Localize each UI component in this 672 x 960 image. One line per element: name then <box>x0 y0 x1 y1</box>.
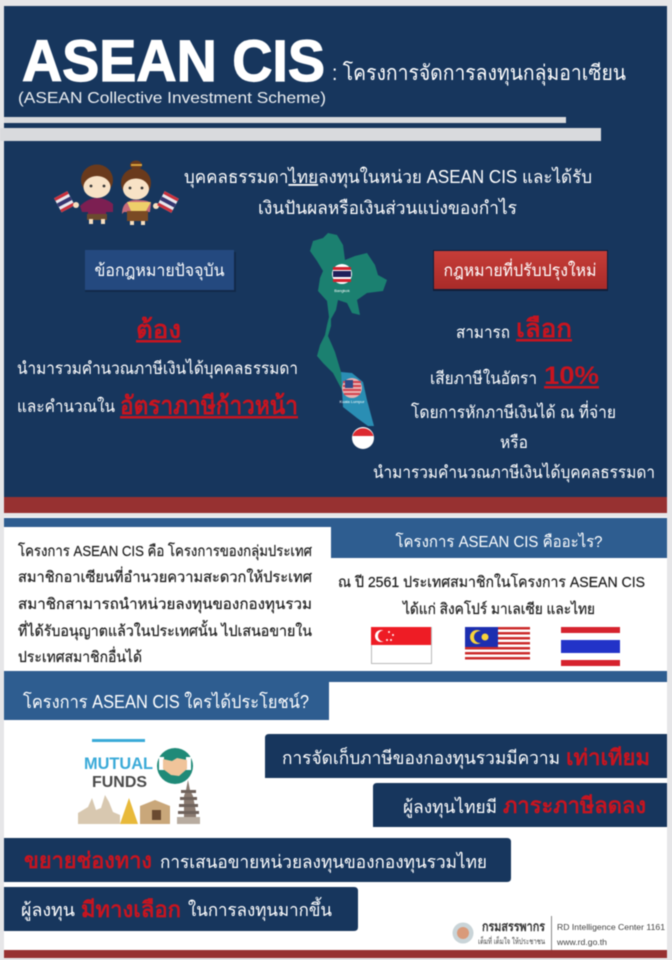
strip and heading: who benefits: โครงการ ASEAN CIS ใครได้ประโยชน์? <box>23 691 309 712</box>
benefit bar: equal tax collection: การจัดเก็บภาษีของกองทุนรวมมีความ <box>282 746 560 769</box>
intro text <box>184 166 592 218</box>
text block: current law <box>17 316 298 420</box>
map: Thailand <box>310 233 387 390</box>
icon: handshake <box>157 748 193 784</box>
text block: new law: โดยการหักภาษีเงินได้ ณ ที่จ่าย <box>411 400 616 422</box>
panel: lower white section <box>4 517 667 950</box>
panel: top navy section <box>0 6 667 497</box>
benefit bar: more choices <box>4 887 358 931</box>
title: (ASEAN Collective Investment Scheme) <box>18 90 326 107</box>
icon: Singapore pin <box>352 427 374 449</box>
footer: Revenue Department credit: กรมสรรพากร <box>482 919 545 934</box>
benefit bar: more choices: ในการลงทุนมากขึ้น <box>188 897 332 921</box>
icon: right flag <box>157 191 179 213</box>
red band <box>4 497 667 513</box>
text block: member countries: ได้แก่ สิงคโปร์ มาเลเซีย และไทย <box>402 600 595 618</box>
button: new law <box>433 250 608 291</box>
title: ASEAN CIS <box>22 29 325 94</box>
text block: definition <box>18 542 312 666</box>
benefit bar: equal tax collection: เท่าเทียม <box>566 745 650 770</box>
text block: current law: และคำนวณใน <box>17 396 115 416</box>
intro text: บุคคลธรรมดาไทยลงทุนในหน่วย ASEAN CIS และได้รับ <box>184 166 592 188</box>
title <box>18 29 626 107</box>
icon: Thai couple with flags <box>54 160 179 225</box>
benefit bar: equal tax collection <box>265 734 667 778</box>
strip and heading: who benefits <box>4 671 667 720</box>
text block: new law: 10% <box>544 362 599 390</box>
icon: Thailand pin: Bangkok <box>334 288 350 293</box>
text block: new law: สามารถ <box>456 323 510 342</box>
text block: current law: อัตราภาษีก้าวหน้า <box>120 392 298 420</box>
icon: Malaysia pin: Kuala Lumpur <box>340 399 365 404</box>
icon: temples <box>78 780 200 824</box>
icon: mutual funds logo: FUNDS <box>92 774 147 791</box>
flag: Thailand <box>561 627 620 666</box>
text block: definition: โครงการ ASEAN CIS คือ โครงการของกลุ่มประเทศ <box>18 542 312 561</box>
benefit bar: lower tax burden <box>373 783 667 827</box>
benefit bar: expanded channels: ขยายช่องทาง <box>24 848 152 873</box>
button: new law: กฎหมายที่ปรับปรุงใหม่ <box>444 258 596 281</box>
icon: Malaysia pin <box>340 378 365 404</box>
text block: new law: เลือก <box>516 315 572 343</box>
map: Thailand, Malaysia and Singapore <box>310 233 387 449</box>
benefit bar: expanded channels: การเสนอขายหน่วยลงทุนของกองทุนรวมไทย <box>160 851 487 873</box>
strip and heading: what is ASEAN CIS: โครงการ ASEAN CIS คืออะไร? <box>396 532 603 551</box>
text block: current law: ต้อง <box>136 316 181 344</box>
text block: new law: หรือ <box>500 433 528 452</box>
map: Malaysia <box>341 372 374 426</box>
button: current law: ข้อกฎหมายปัจจุบัน <box>94 261 225 281</box>
icon: boy <box>80 164 113 224</box>
footer: Revenue Department credit <box>452 916 665 950</box>
icon: department seal <box>452 922 474 944</box>
benefit bar: more choices: มีทางเลือก <box>81 897 181 922</box>
title divider bars <box>0 117 601 141</box>
text block: current law: นำมารวมคำนวณภาษีเงินได้บุคคลธรรมดา <box>17 358 298 379</box>
text block: definition: ประเทศสมาชิกอื่นได้ <box>18 646 142 666</box>
title: : โครงการจัดการลงทุนกลุ่มอาเซียน <box>332 61 626 86</box>
benefit bar: expanded channels <box>4 838 511 882</box>
footer: Revenue Department credit: www.rd.go.th <box>556 937 607 947</box>
icon: Thailand pin <box>332 264 352 293</box>
icon: girl <box>121 160 151 225</box>
text block: member countries <box>338 573 645 618</box>
footer: Revenue Department credit: RD Intelligence Center 1161 <box>557 922 665 932</box>
text block: new law <box>373 315 655 483</box>
footer: Revenue Department credit: เต็มที่ เต็มใจ ให้ประชาชน <box>478 935 545 946</box>
benefit bar: more choices: ผู้ลงทุน <box>21 900 75 921</box>
icon: mutual funds logo <box>78 739 200 824</box>
text block: member countries: ณ ปี 2561 ประเทศสมาชิกในโครงการ ASEAN CIS <box>338 573 645 591</box>
benefit bar: lower tax burden: ผู้ลงทุนไทยมี <box>403 796 497 818</box>
text block: definition: สมาชิกอาเซียนที่อำนวยความสะดวกให้ประเทศ <box>18 566 312 586</box>
text block: definition: ที่ได้รับอนุญาตแล้วในประเทศนั้น ไปเสนอขายใน <box>18 620 312 641</box>
intro text: เงินปันผลหรือเงินส่วนแบ่งของกำไร <box>258 197 517 218</box>
text block: definition: สมาชิกสามารถนำหน่วยลงทุนของกองทุนรวม <box>18 596 312 614</box>
text block: new law: เสียภาษีในอัตรา <box>430 368 537 388</box>
flag: Singapore <box>371 627 432 664</box>
red footer band <box>4 950 667 958</box>
benefit bar: lower tax burden: ภาระภาษีลดลง <box>503 793 646 818</box>
button: current law <box>85 250 236 292</box>
icon: mutual funds logo: MUTUAL <box>84 754 153 773</box>
flag: Malaysia <box>465 627 530 662</box>
icon: left flag <box>54 191 75 212</box>
strip and heading: what is ASEAN CIS <box>4 518 667 558</box>
